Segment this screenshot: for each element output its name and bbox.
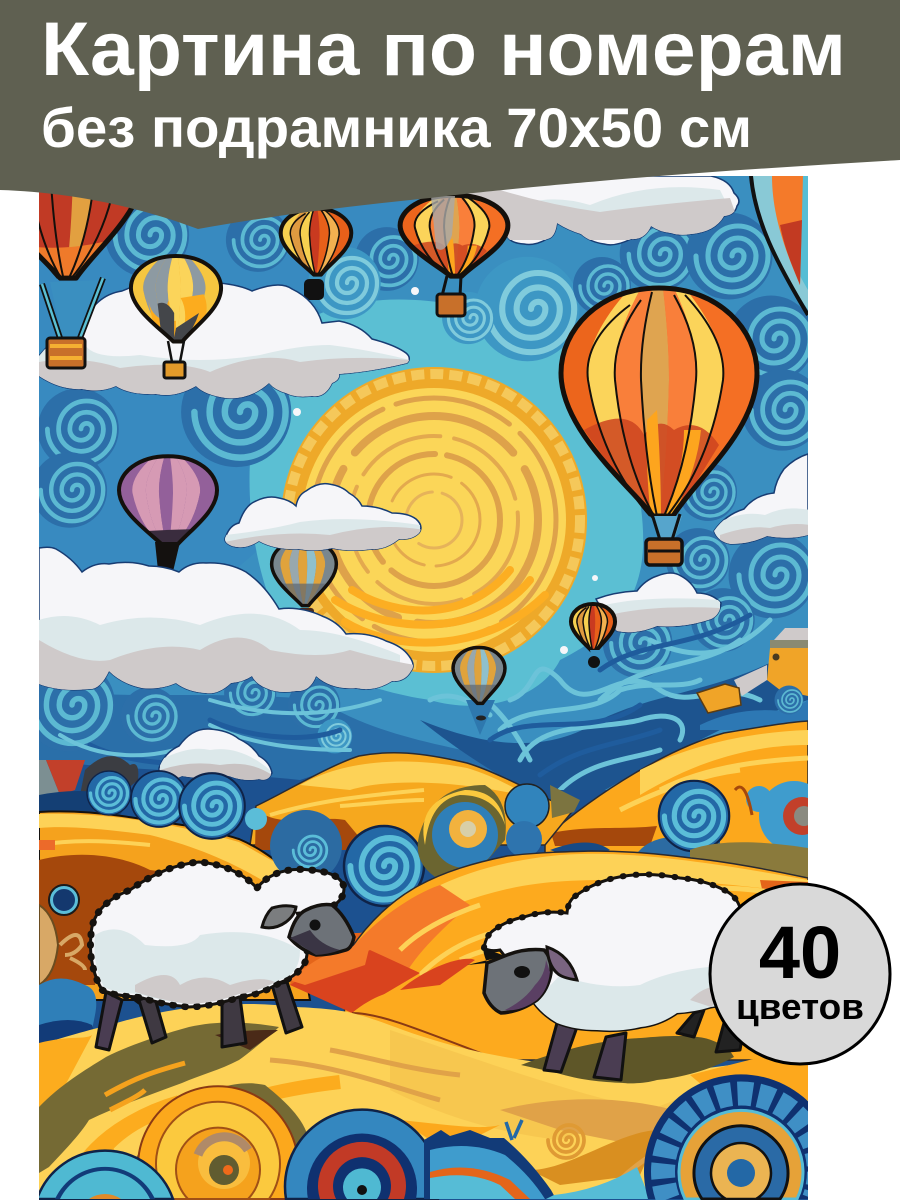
hill: middle	[250, 753, 575, 850]
sky waves	[60, 615, 770, 790]
swirl: bottom right	[644, 1074, 838, 1199]
balloon: purple	[118, 455, 218, 580]
cloud: small right	[596, 573, 721, 635]
cloud: low	[159, 729, 272, 785]
foreground field	[39, 1004, 808, 1199]
balloon: small top	[280, 208, 352, 300]
painting	[39, 176, 808, 1200]
bottom swirls	[37, 1074, 838, 1199]
swirl: bottom left	[37, 1151, 173, 1199]
badge number: 40	[759, 911, 841, 994]
balloon: large	[559, 285, 759, 565]
subtitle: без подрамника 70х50 см	[41, 96, 752, 159]
dots in sky	[293, 287, 598, 654]
top left balloon ropes and basket	[42, 278, 103, 368]
cloud: top	[467, 176, 740, 246]
left edge pattern	[39, 884, 122, 1043]
hill: centre lower	[289, 851, 808, 1060]
header band	[0, 0, 900, 229]
balloon: top right	[751, 176, 808, 315]
landscape back	[37, 721, 838, 1200]
hill: right	[544, 720, 808, 852]
swirl: centre blue	[285, 1110, 439, 1199]
sky background	[39, 176, 808, 840]
balloon: yellow grey	[130, 255, 222, 378]
title: Картина по номерам	[41, 7, 846, 92]
sheep: right	[467, 874, 751, 1080]
hill: left	[39, 811, 310, 1000]
badge: colour count	[710, 884, 890, 1064]
swirl balls	[87, 771, 829, 906]
sun	[281, 367, 587, 673]
badge label: цветов	[736, 986, 864, 1027]
cloud: left upper	[39, 278, 410, 400]
swirl: yellow	[138, 1086, 298, 1199]
balloon: grey low	[452, 647, 506, 735]
machine at right	[697, 628, 808, 730]
cloud: right	[714, 454, 810, 545]
red structure	[39, 756, 138, 815]
balloon: top left	[39, 192, 134, 281]
sky swirls	[22, 193, 823, 753]
balloon: grey yellow	[270, 548, 338, 612]
swirl: bottom middle	[424, 1120, 650, 1199]
balloon: small red	[570, 603, 616, 668]
balloon: top centre	[399, 194, 509, 316]
cloud: large left	[39, 547, 415, 695]
cloud: centre	[225, 484, 425, 555]
sheep: left	[90, 862, 354, 1050]
